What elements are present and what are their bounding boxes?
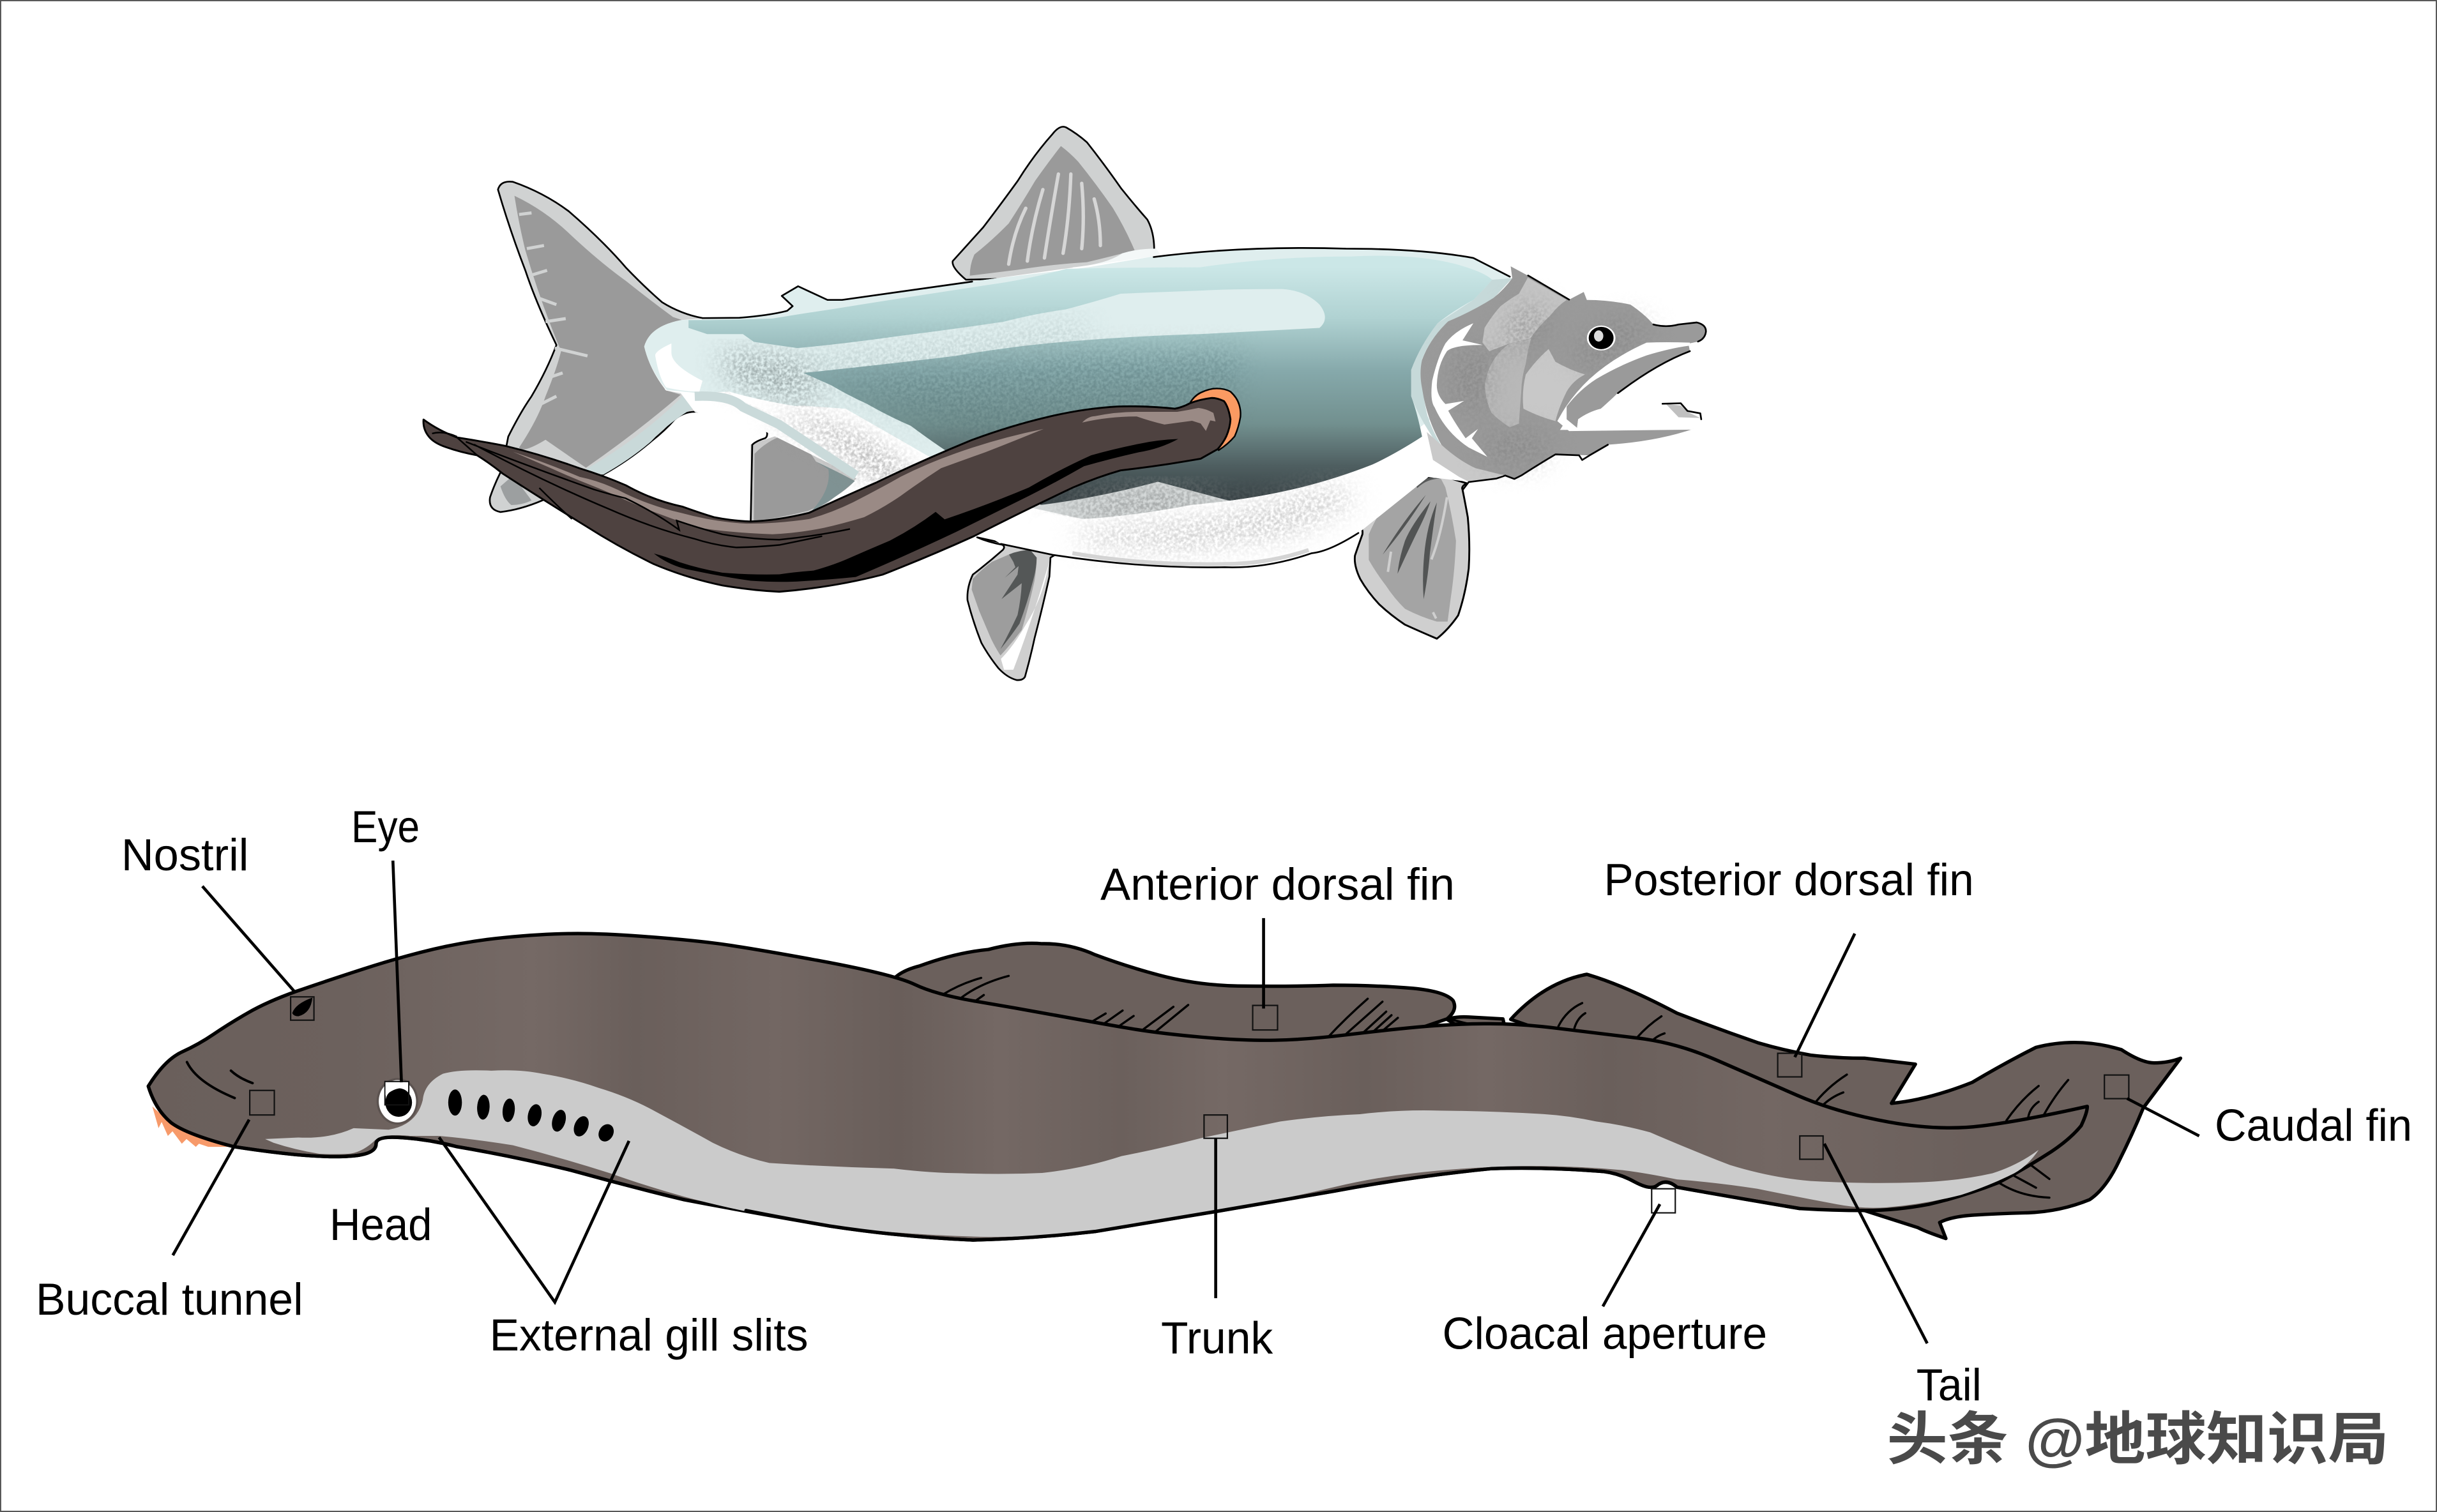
gill patch three <box>1523 349 1585 421</box>
snout lines <box>187 1062 252 1098</box>
external gill slits <box>448 1089 617 1144</box>
fish eye <box>1587 326 1616 351</box>
head base <box>1420 266 1706 479</box>
gill patch two <box>1485 339 1531 427</box>
label: Posterior dorsal fin: Posterior dorsal fin <box>1604 854 1974 905</box>
pale underlayer <box>644 248 1511 517</box>
fish caudal fin <box>490 181 702 512</box>
illustration: host fish with attached lamprey <box>423 126 1706 680</box>
label: Caudal fin: Caudal fin <box>2215 1100 2412 1150</box>
teal flank <box>688 255 1492 517</box>
lamprey black band <box>654 439 1178 582</box>
lamprey lower outline <box>233 1137 1800 1240</box>
lamprey fin lines <box>432 432 850 547</box>
cheek grey <box>1567 346 1690 428</box>
leader lines <box>173 861 2199 1343</box>
pale rear stipple <box>718 351 831 401</box>
label: Nostril: Nostril <box>121 829 248 880</box>
fish head <box>1411 266 1706 490</box>
fish dorsal fin <box>953 126 1162 280</box>
lamprey silhouette <box>423 398 1231 592</box>
lamprey side highlight <box>513 429 1044 534</box>
lamprey belly <box>265 1070 2038 1237</box>
lower grey stipple under lamprey <box>1026 481 1243 519</box>
label: External gill slits: External gill slits <box>490 1310 809 1360</box>
attached lamprey <box>423 388 1241 592</box>
gill band <box>1411 278 1512 477</box>
lamprey body <box>148 934 2087 1240</box>
white belly <box>1001 437 1445 568</box>
white mouth interior <box>1577 389 1694 429</box>
label: Head: Head <box>330 1199 432 1250</box>
anterior dorsal fin <box>891 943 1505 1057</box>
stripe speckle <box>793 320 1088 373</box>
fish body <box>644 248 1511 568</box>
label: Buccal tunnel: Buccal tunnel <box>36 1274 303 1324</box>
lower jaw flap <box>1666 404 1700 418</box>
label: Cloacal aperture: Cloacal aperture <box>1442 1308 1767 1358</box>
label: Trunk: Trunk <box>1161 1313 1273 1363</box>
gill patch one <box>1482 278 1567 351</box>
nostril <box>292 997 312 1017</box>
lamprey head highlight <box>1082 408 1215 431</box>
label: Eye: Eye <box>351 801 420 852</box>
watermark: 头条 @地球知识局 <box>1887 1407 2389 1472</box>
eye <box>377 1078 418 1124</box>
head stipple <box>1453 303 1655 463</box>
label: Anterior dorsal fin: Anterior dorsal fin <box>1100 859 1455 909</box>
oral fringe <box>152 1107 232 1147</box>
orange sucker <box>1190 388 1241 450</box>
body outline <box>702 248 1510 568</box>
marker squares <box>250 997 2129 1213</box>
body silhouette <box>644 248 1511 568</box>
white stippled flank <box>729 391 979 510</box>
fish pectoral fin <box>1355 476 1469 639</box>
belly stipple <box>1072 485 1360 552</box>
fish anal fin <box>695 411 856 522</box>
white gill crescent <box>1431 323 1487 457</box>
rear white spot <box>655 344 702 391</box>
head outline <box>1463 276 1706 490</box>
teal stipple <box>816 350 1243 451</box>
label: Tail: Tail <box>1917 1359 1982 1410</box>
lamprey anatomy diagram <box>36 801 2412 1410</box>
posterior dorsal and caudal fins <box>1511 974 2180 1239</box>
upper jaw white stripe <box>1558 342 1700 431</box>
fish ventral fin <box>968 538 1056 680</box>
